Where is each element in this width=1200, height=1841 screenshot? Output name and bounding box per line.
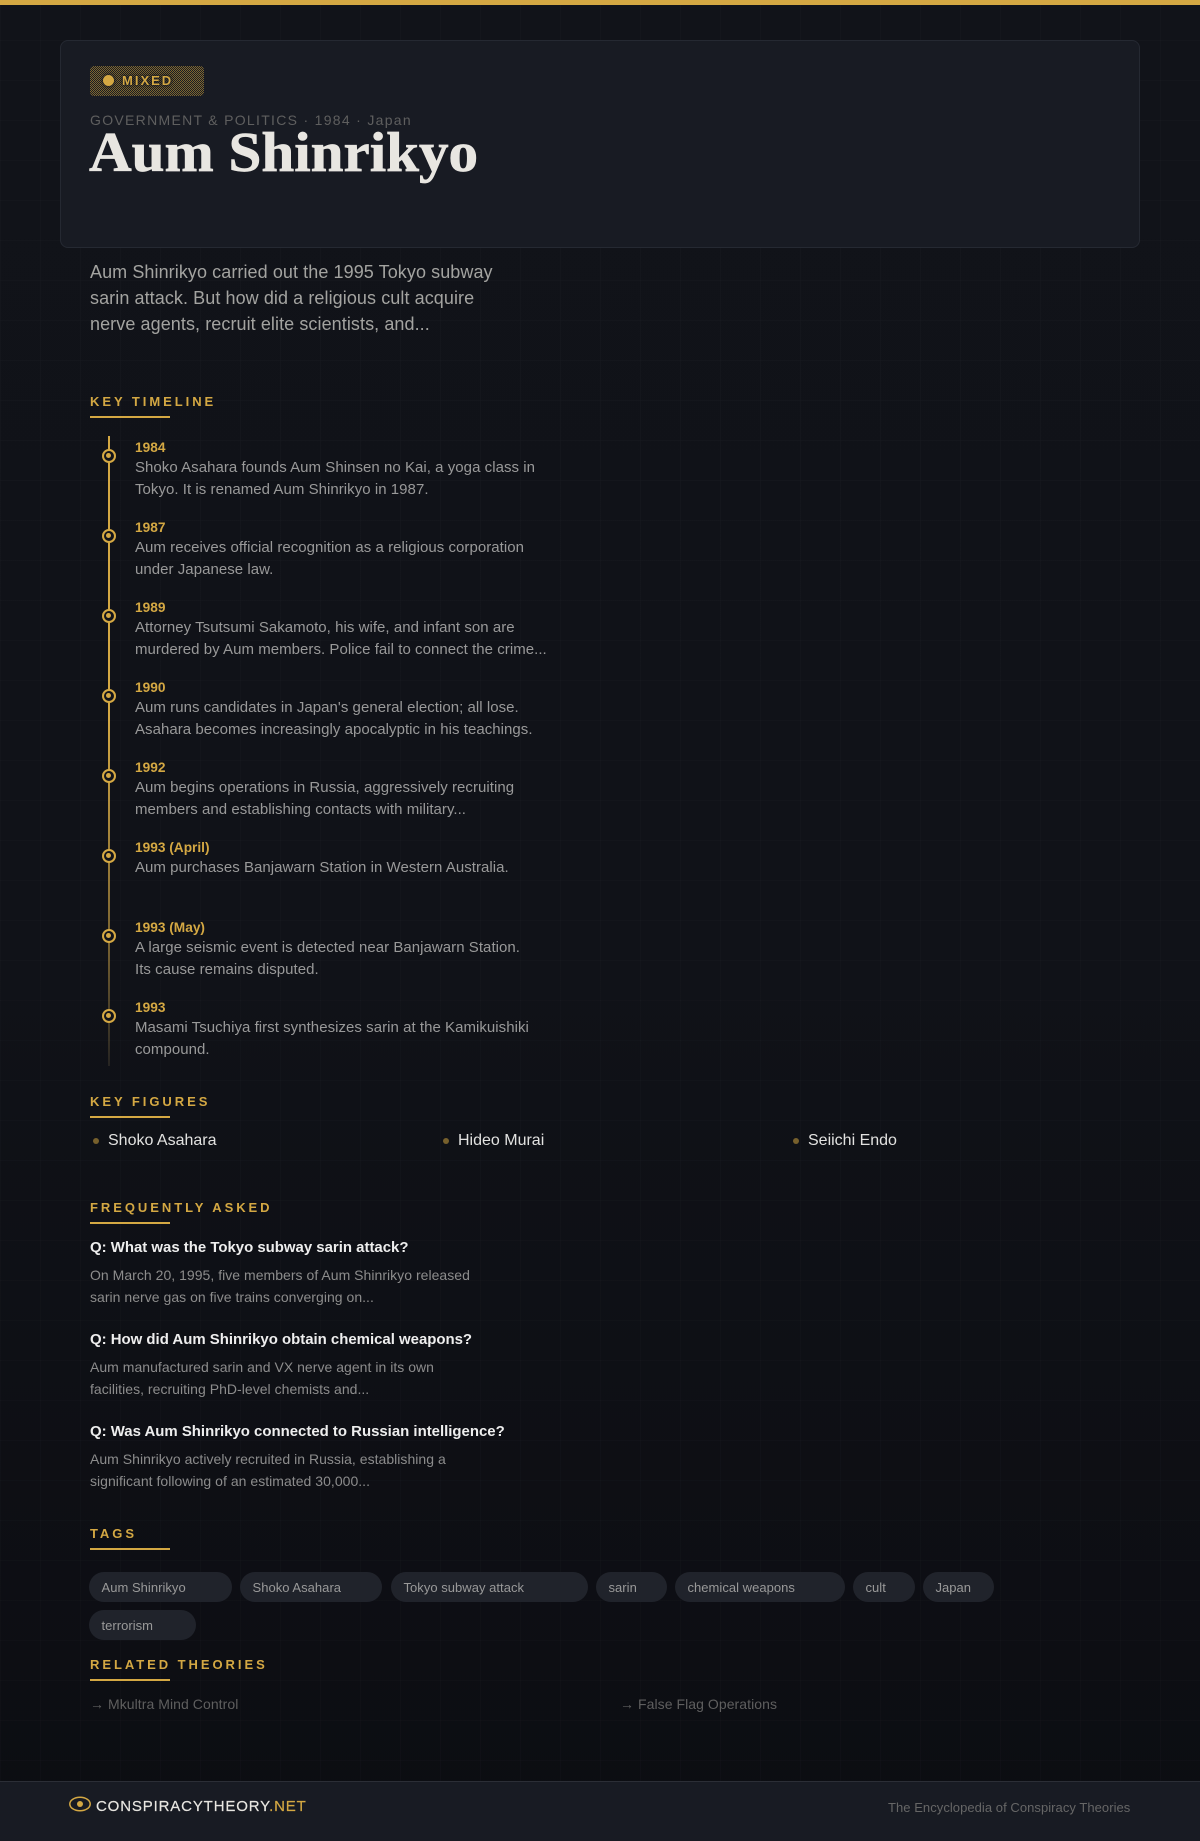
tag: Japan [936, 1580, 971, 1595]
tag: terrorism [102, 1618, 153, 1633]
heading: key figures: KEY FIGURES [90, 1094, 210, 1109]
event 1993 sarin [102, 1000, 529, 1058]
faq 3: significant following of an estimated 30,000... [90, 1473, 370, 1489]
event 1993 sarin: compound. [135, 1041, 210, 1058]
faq 1: Q: What was the Tokyo subway sarin attack? [90, 1239, 408, 1256]
description [90, 262, 493, 334]
badge label: MIXED [122, 73, 173, 88]
event 1993 May: A large seismic event is detected near Banjawarn Station. [135, 939, 520, 956]
tag: sarin [608, 1580, 637, 1595]
verdict badge [90, 66, 204, 96]
figure: Shoko Asahara: Shoko Asahara [108, 1132, 217, 1149]
figure: Seiichi Endo: Seiichi Endo [808, 1132, 897, 1149]
tag: Tokyo subway attack [404, 1580, 524, 1595]
event 1993 April: 1993 (April) [135, 840, 210, 855]
timeline spine [108, 436, 110, 1066]
icon: eye logo [69, 1796, 91, 1812]
faq 3 [90, 1423, 505, 1489]
event 1987: Aum receives official recognition as a religious corporation [135, 539, 524, 556]
heading: frequently asked: FREQUENTLY ASKED [90, 1200, 273, 1215]
faq 2: Q: How did Aum Shinrikyo obtain chemical weapons? [90, 1331, 472, 1348]
tag: Shoko Asahara [252, 1580, 341, 1595]
event 1990: Aum runs candidates in Japan's general election; all lose. [135, 699, 519, 716]
heading: key timeline: KEY TIMELINE [90, 394, 216, 409]
tag [89, 1610, 196, 1640]
footer [0, 1781, 1200, 1841]
tag [923, 1572, 994, 1602]
event 1993 sarin: 1993 [135, 1000, 165, 1015]
event 1992: members and establishing contacts with military... [135, 801, 466, 818]
tag: cult [866, 1580, 886, 1595]
tag [391, 1572, 588, 1602]
tagline: The Encyclopedia of Conspiracy Theories [888, 1800, 1130, 1815]
event 1990: Asahara becomes increasingly apocalyptic in his teachings. [135, 721, 533, 738]
event 1990 [102, 680, 533, 738]
top accent bar [0, 0, 1200, 5]
event 1987: 1987 [135, 520, 165, 535]
key figures list [93, 1132, 897, 1149]
hero card [60, 40, 1140, 248]
event 1993 April: Aum purchases Banjawarn Station in Western Australia. [135, 859, 509, 876]
faq 1 [90, 1239, 470, 1305]
event 1993 May: 1993 (May) [135, 920, 205, 935]
badge dot [103, 75, 114, 86]
event 1987: under Japanese law. [135, 561, 273, 578]
tags [89, 1572, 994, 1640]
tag [240, 1572, 382, 1602]
event 1984: 1984 [135, 440, 165, 455]
category meta: GOVERNMENT & POLITICS · 1984 · Japan [90, 112, 412, 128]
event 1989: 1989 [135, 600, 165, 615]
figure: Hideo Murai: Hideo Murai [458, 1132, 544, 1149]
event 1984: Tokyo. It is renamed Aum Shinrikyo in 1987. [135, 481, 429, 498]
faq 2 [90, 1331, 472, 1397]
description: Aum Shinrikyo carried out the 1995 Tokyo subway [90, 262, 493, 282]
event 1984 [102, 440, 535, 498]
brand name: CONSPIRACYTHEORY.NET [96, 1798, 307, 1815]
tag [853, 1572, 915, 1602]
related theories [90, 1696, 777, 1712]
heading: tags: TAGS [90, 1526, 137, 1541]
event 1993 sarin: Masami Tsuchiya first synthesizes sarin at the Kamikuishiki [135, 1019, 529, 1036]
event 1989: murdered by Aum members. Police fail to connect the crime... [135, 641, 547, 658]
event 1989 [102, 600, 547, 658]
tag [596, 1572, 667, 1602]
event 1993 May: Its cause remains disputed. [135, 961, 319, 978]
heading: related theories: RELATED THEORIES [90, 1657, 268, 1672]
faq 2: Aum manufactured sarin and VX nerve agent in its own [90, 1359, 434, 1375]
event 1987 [102, 520, 524, 578]
tag [89, 1572, 232, 1602]
faq 3: Q: Was Aum Shinrikyo connected to Russian intelligence? [90, 1423, 505, 1440]
event 1993 May [102, 920, 520, 978]
event 1993 April [102, 840, 509, 876]
title: Aum Shinrikyo [89, 122, 478, 184]
faq 1: sarin nerve gas on five trains converging on... [90, 1289, 374, 1305]
event 1992 [102, 760, 514, 818]
faq 3: Aum Shinrikyo actively recruited in Russia, establishing a [90, 1451, 446, 1467]
related link: → Mkultra Mind Control [90, 1696, 238, 1712]
faq list [90, 1239, 505, 1489]
faq 1: On March 20, 1995, five members of Aum Shinrikyo released [90, 1267, 470, 1283]
tag [675, 1572, 845, 1602]
event 1989: Attorney Tsutsumi Sakamoto, his wife, and infant son are [135, 619, 515, 636]
event 1992: 1992 [135, 760, 165, 775]
description: nerve agents, recruit elite scientists, and... [90, 314, 430, 334]
description: sarin attack. But how did a religious cult acquire [90, 288, 474, 308]
event 1992: Aum begins operations in Russia, aggressively recruiting [135, 779, 514, 796]
related link: → False Flag Operations [620, 1696, 777, 1712]
event 1990: 1990 [135, 680, 165, 695]
tag: chemical weapons [688, 1580, 795, 1595]
faq 2: facilities, recruiting PhD-level chemists and... [90, 1381, 369, 1397]
tag: Aum Shinrikyo [102, 1580, 186, 1595]
event 1984: Shoko Asahara founds Aum Shinsen no Kai, a yoga class in [135, 459, 535, 476]
timeline [102, 436, 547, 1066]
